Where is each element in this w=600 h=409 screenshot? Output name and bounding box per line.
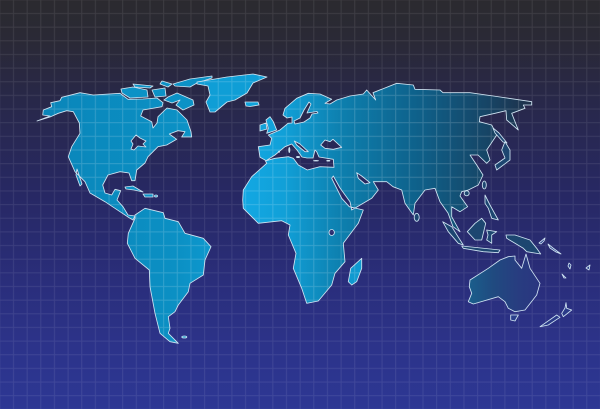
asian islands xyxy=(414,128,541,254)
australia xyxy=(468,254,540,312)
tasmania xyxy=(511,315,518,321)
arctic islands xyxy=(121,76,212,110)
world map xyxy=(37,74,590,343)
british isles xyxy=(260,117,277,133)
iceland xyxy=(245,102,259,106)
pacific islands xyxy=(539,238,590,278)
grid lines over land xyxy=(46,75,523,342)
caribbean islands xyxy=(125,186,158,197)
south america xyxy=(127,208,211,343)
africa and eurasia xyxy=(243,83,532,303)
mediterranean islands xyxy=(278,147,330,162)
new zealand xyxy=(540,303,572,327)
greenland xyxy=(197,74,267,112)
north america xyxy=(37,93,192,220)
falkland islands xyxy=(182,336,187,338)
madagascar xyxy=(348,258,362,285)
